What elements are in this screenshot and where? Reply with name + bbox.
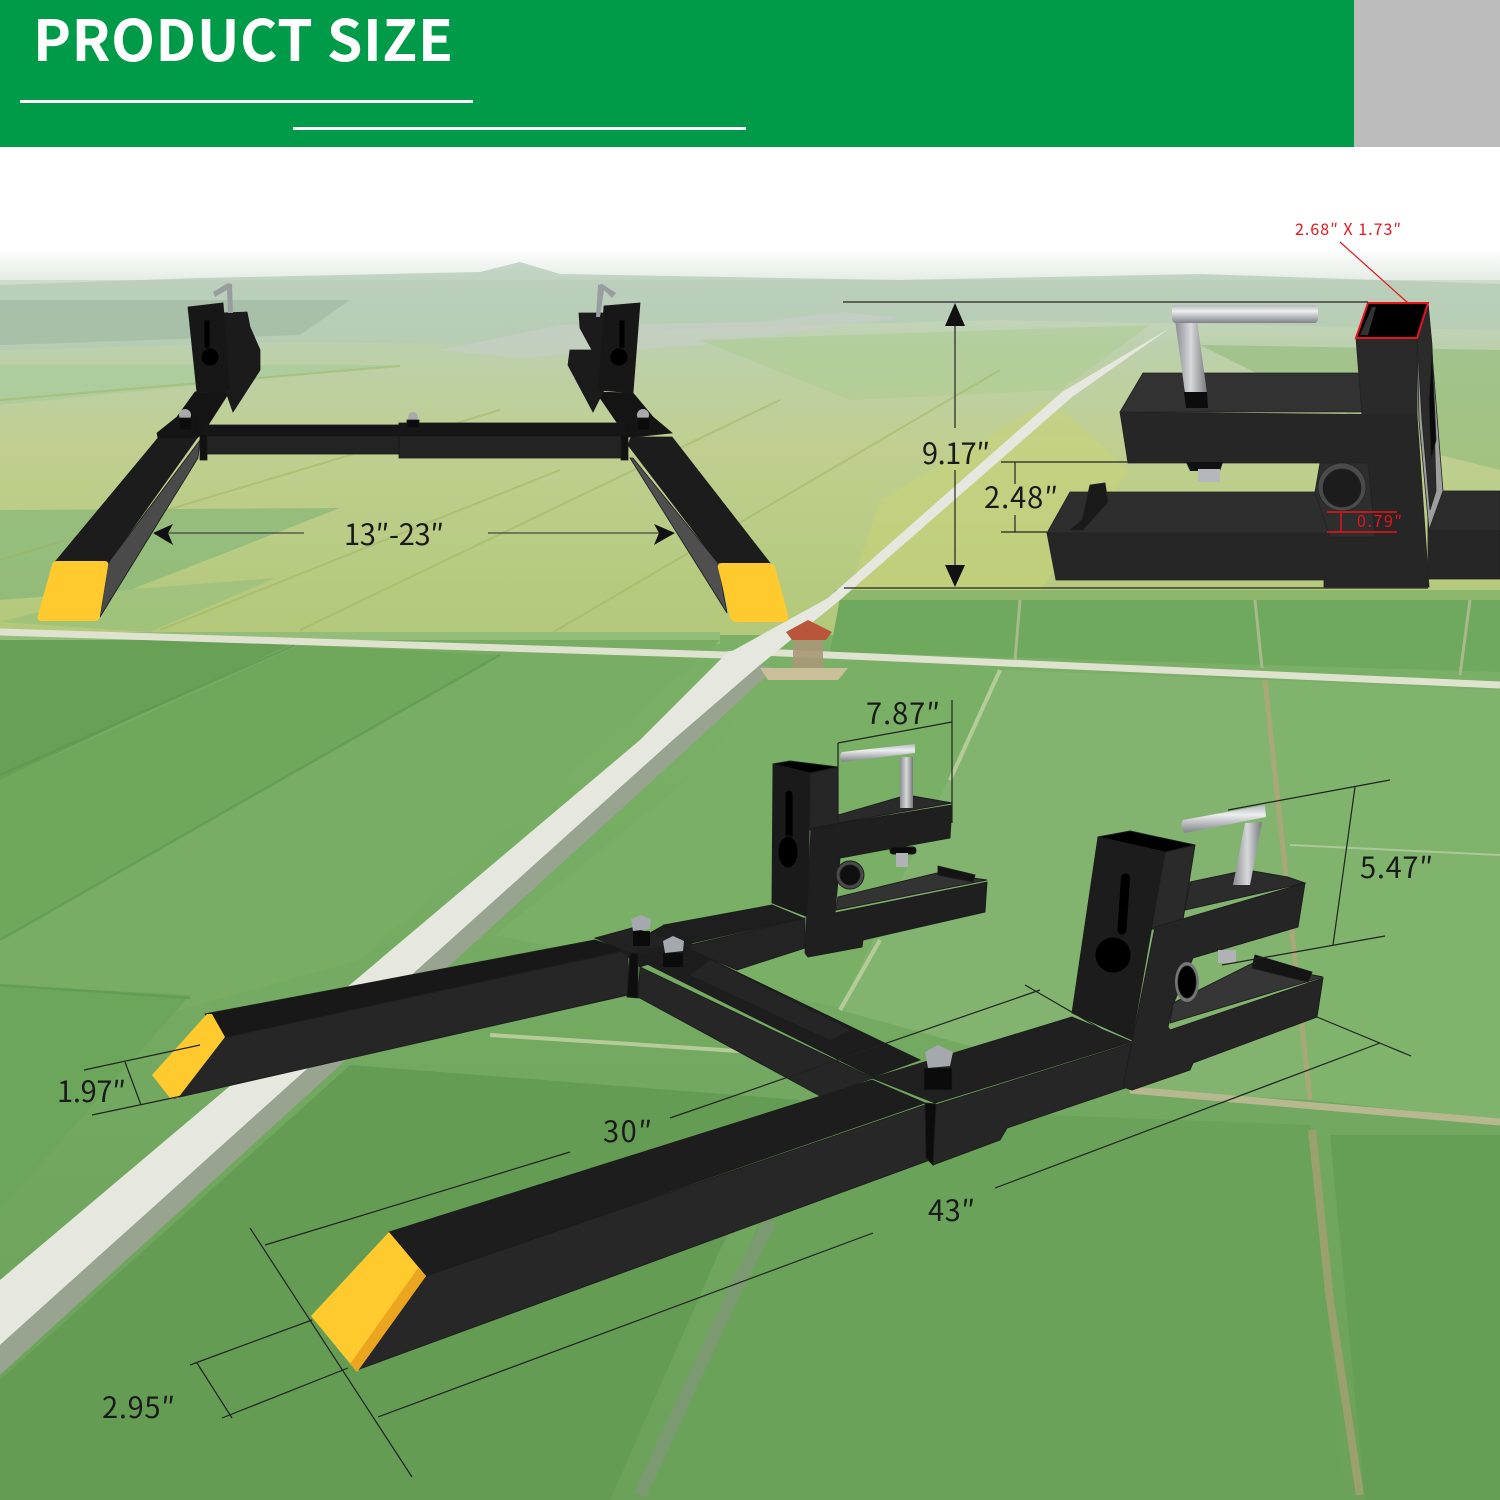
icon: pavilion xyxy=(760,620,848,680)
label: 7.87": 7.87″ xyxy=(866,691,940,733)
label: 43": 43″ xyxy=(928,1188,975,1230)
label: 1.97": 1.97″ xyxy=(57,1069,126,1111)
icon: yellow fork tips xyxy=(38,561,788,622)
bolts on rear plate xyxy=(631,915,684,967)
dimension: 13"-23" width: 13″-23″ xyxy=(344,512,444,554)
left fork arm xyxy=(55,283,260,617)
label: 2.95": 2.95″ xyxy=(102,1385,175,1427)
dimension: 0.79" red: 0.79″ xyxy=(1357,508,1402,532)
cross beam xyxy=(595,928,920,1097)
dimension: 9.17" height xyxy=(843,302,1428,588)
label: 30": 30″ xyxy=(603,1109,652,1151)
label: 5.47": 5.47″ xyxy=(1360,845,1433,887)
rear fork stub xyxy=(1428,491,1500,531)
forks: front view, top left xyxy=(38,283,788,622)
L plate xyxy=(1047,412,1429,587)
arm top faces xyxy=(1120,373,1362,412)
dimension: 0.79" red xyxy=(1327,508,1402,532)
clamp: rear upright xyxy=(772,744,987,957)
distant hills xyxy=(0,262,1500,350)
rear fork arm xyxy=(152,905,805,1098)
dimension: 13"-23" width xyxy=(153,512,675,554)
upright tube xyxy=(1356,338,1417,415)
dimension: 2.48": 2.48″ xyxy=(984,475,1058,517)
side slit face xyxy=(1417,303,1443,530)
right fork arm xyxy=(568,284,770,613)
main forks: perspective view xyxy=(152,744,1323,1372)
clamp: front upright xyxy=(1072,805,1323,1090)
clamp detail: side view, top right xyxy=(1047,303,1500,587)
road xyxy=(0,328,1170,1345)
dimension: 9.17" height: 9.17″ xyxy=(922,431,990,473)
dimension lines: main view xyxy=(84,700,1411,1477)
header banner xyxy=(0,0,1500,147)
cross beam xyxy=(200,412,628,460)
front fork arm xyxy=(311,1017,1132,1372)
dimension: 2.68" X 1.73" red callout xyxy=(1295,216,1408,303)
dimension: 2.68" X 1.73" red callout: 2.68″ X 1.73″ xyxy=(1295,216,1401,240)
icon: T-handle pin xyxy=(1172,305,1318,482)
